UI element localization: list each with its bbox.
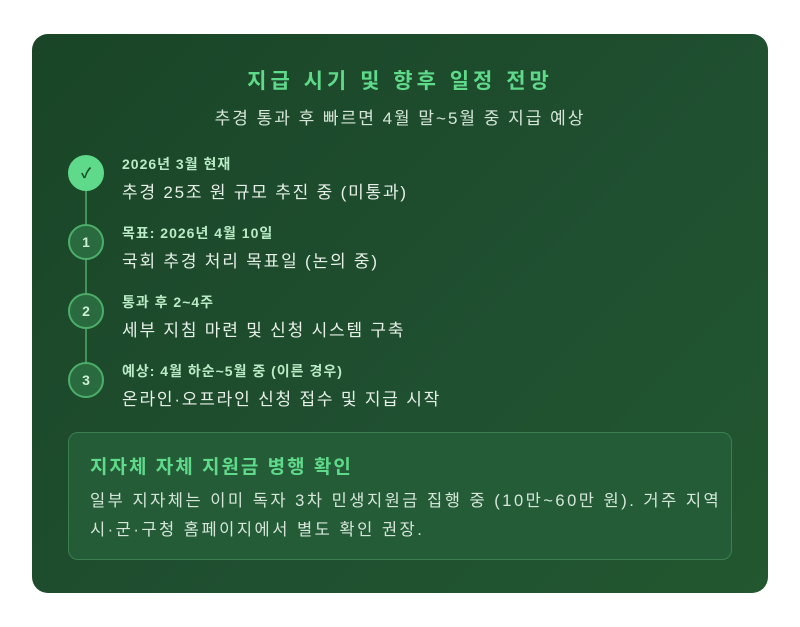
subtitle: 추경 통과 후 빠르면 4월 말~5월 중 지급 예상 <box>215 109 585 128</box>
box text <box>90 492 721 539</box>
step 1: 목표: 2026년 4월 10일 <box>122 225 273 241</box>
step 3: 예상: 4월 하순~5월 중 (이른 경우) <box>122 363 343 379</box>
step: current: 2026년 3월 현재 <box>122 156 231 172</box>
box text: 시·군·구청 홈페이지에서 별도 확인 권장. <box>90 521 424 539</box>
step 3: 온라인·오프라인 신청 접수 및 지급 시작 <box>122 390 441 409</box>
step: current <box>68 155 408 202</box>
step 1: 국회 추경 처리 목표일 (논의 중) <box>122 252 379 271</box>
step 3 <box>68 362 441 409</box>
step 2: 세부 지침 마련 및 신청 시스템 구축 <box>122 321 405 340</box>
box title: 지자체 자체 지원금 병행 확인 <box>90 457 353 478</box>
step 1 <box>68 224 379 271</box>
timeline <box>68 155 441 409</box>
step 1: 1 <box>82 234 90 250</box>
title: 지급 시기 및 향후 일정 전망 <box>247 70 553 93</box>
step: current: 추경 25조 원 규모 추진 중 (미통과) <box>122 183 408 202</box>
step 2: 통과 후 2~4주 <box>122 294 214 310</box>
step 3: 3 <box>82 372 90 388</box>
step 2: 2 <box>82 303 90 319</box>
box text: 일부 지자체는 이미 독자 3차 민생지원금 집행 중 (10만~60만 원). 거주 지역 <box>90 492 721 510</box>
step 2 <box>68 293 405 340</box>
step: current: ✓ <box>81 165 91 181</box>
info box <box>68 432 732 560</box>
